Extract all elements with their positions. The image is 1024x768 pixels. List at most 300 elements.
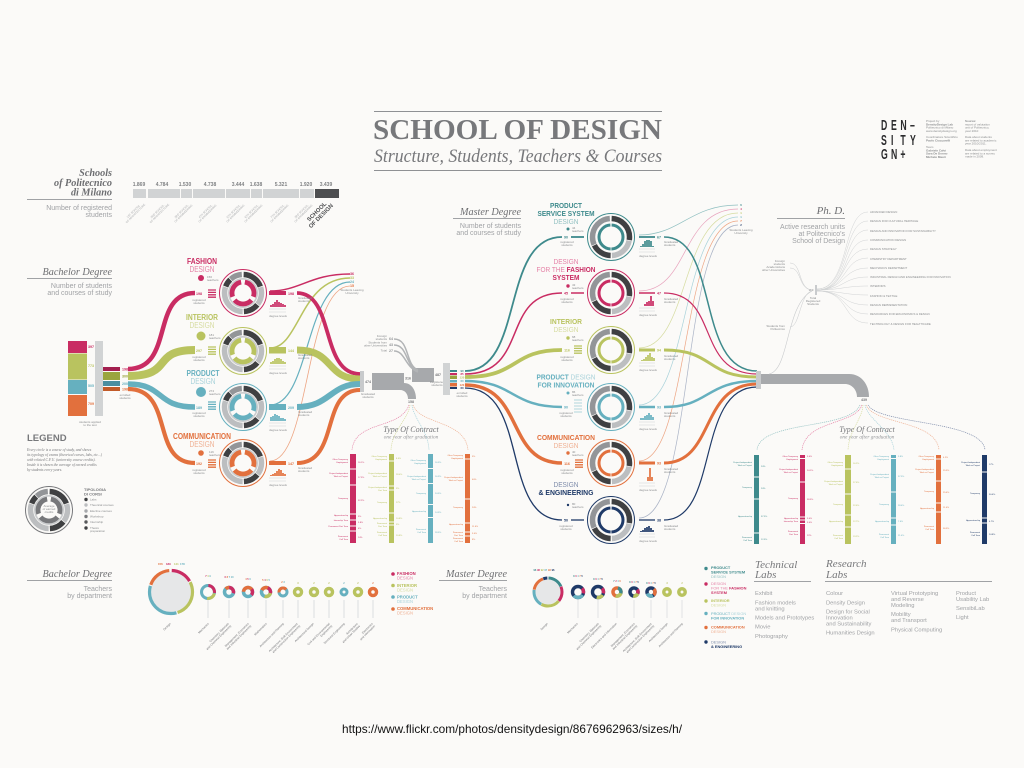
flows: grey hub from bachelor to master: 158 [408, 400, 414, 404]
legend: course types: DI CORSI [84, 492, 102, 496]
flows: grey hub from bachelor to master: 487 [435, 373, 441, 377]
panel: master communication ring: students [664, 470, 676, 474]
contract bar: fashion: Apprenticeship [334, 514, 349, 517]
contract bar: interior: 28.4% [396, 474, 402, 476]
heading: pss [538, 201, 594, 226]
master donut value labels: 3 [666, 582, 668, 585]
panel: fashion system ring: Graduated [664, 297, 679, 301]
legend: master courses: DESIGN [711, 602, 726, 608]
flows: master leaving university curves: 1 [740, 215, 742, 219]
contract bar: product: Work or Project [412, 478, 426, 481]
panel: product service system ring: students [664, 243, 676, 247]
panel: master communication ring: 40 [572, 450, 576, 454]
contract bar: interior: Permanent [377, 522, 387, 525]
panel: product design for innovation ring: registered [559, 411, 573, 415]
contract bar: master communication: 11.4% [943, 507, 949, 509]
flows: master leaving university curves: 4 [740, 207, 742, 211]
big donut: design: Design [162, 622, 172, 631]
contract bar: communication: Temporary [453, 506, 464, 509]
contract bar: communication: Work or Project [449, 479, 463, 482]
contract bar: master innovation: Project-Independent [870, 473, 889, 476]
panel: product service system ring [538, 201, 679, 260]
legend: by students every years. [27, 468, 62, 472]
flows: master leaving university curves: 2 [740, 223, 742, 227]
panel: research labs: Mobility [891, 612, 911, 618]
bar chart: registered students: 6TH SCHOOL [244, 204, 259, 219]
panel: technical labs: Photography [755, 634, 788, 640]
heading: communication design: COMMUNICATION [173, 432, 231, 441]
panel: bachelor input stack: 200 [122, 382, 128, 386]
contract bar: product [407, 454, 441, 543]
panel: fashion design ring: 198 [196, 292, 202, 296]
master donut value labels: 7 2 4 6 [613, 580, 621, 583]
heading: master teachers [439, 569, 507, 600]
department labels: Structural Engineering [323, 622, 346, 645]
small donut value labels: 5 4 6 5 [262, 579, 270, 582]
endpoint labels: bachelor exit [340, 272, 364, 295]
panel: fashion design ring [187, 257, 313, 318]
panel: master interior ring: students [664, 357, 676, 361]
panel: product design ring: 274 [209, 389, 214, 393]
panel: research labs: Density Design [826, 600, 865, 606]
endpoint labels: bachelor exit: 36 [350, 272, 354, 276]
panel: design and engineering ring: 38 [657, 518, 661, 522]
legend: course types: Theorical courses [90, 503, 114, 507]
bar chart: registered students: OF ENGINEERING [173, 203, 193, 223]
small donut value labels: 6 8 7 10 [224, 576, 234, 579]
contract bar: master fashion: Permanent [788, 530, 798, 533]
heading: design for the fashion system [536, 257, 596, 282]
contract bar: master interior [824, 455, 859, 544]
flows: grey hub from bachelor to master: 85 [460, 372, 464, 376]
panel: master communication ring: registered [560, 468, 574, 472]
panel: master interior ring [550, 317, 679, 374]
contract bar: communication: Full Time [455, 541, 464, 543]
flows: grey hub from bachelor to master: 60 [460, 386, 464, 390]
bar chart: registered students: 1.869 [133, 182, 145, 188]
bar chart: registered students: SCHOOL [306, 201, 328, 223]
heading: fashion design: DESIGN [190, 265, 215, 274]
panel: technical labs: Exhibit [755, 591, 773, 597]
panel: product design ring: students [298, 413, 310, 417]
contract bar: master innovation: Employment [877, 458, 889, 461]
panel: technical labs: Labs [754, 569, 776, 581]
panel: fashion design ring: students [193, 301, 205, 305]
heading: innovation: FOR INNOVATION [538, 380, 594, 390]
legend: bachelor courses: INTERIOR [397, 583, 417, 588]
credits: Project by [926, 119, 940, 123]
panel: design and engineering ring [538, 480, 679, 544]
panel: master communication ring: 93 [657, 462, 661, 466]
legend ring [26, 486, 72, 534]
contract bar: fashion: Project-Independent [329, 472, 348, 475]
contract bar: master interior: 16.2% [853, 463, 859, 465]
heading: design for the fashion system: FOR THE FASHION [536, 265, 596, 274]
contract bar: master communication: Project-Independent [915, 468, 934, 471]
contract bar: communication: 8% [472, 539, 475, 541]
phd research unit labels: TECHNOLOGY & DESIGN FOR HEALTHCARE [870, 322, 931, 326]
credits: report of valutation [965, 122, 990, 126]
contract bar: master fashion: 38.5% [807, 499, 813, 501]
flows: bachelor incoming [128, 293, 195, 463]
department labels: and Urban Studies [341, 624, 361, 644]
credits: year 2010 [965, 129, 979, 133]
contract bar: master engineering: Permanent [970, 531, 980, 534]
panel: fashion system ring: students [664, 300, 676, 304]
legend: bachelor courses: DESIGN [397, 588, 413, 592]
panel: fashion system ring: teachers [572, 286, 584, 290]
panel: master communication ring: students [561, 471, 573, 475]
panel: design and engineering ring: teachers [572, 505, 584, 509]
contract bar: master innovation: 37.5% [898, 476, 904, 478]
credits: Politecnico di Milano [926, 126, 954, 130]
contract bar: master communication: Employment [922, 458, 934, 461]
contract bar: master fashion: Part Time [789, 533, 799, 536]
master donut value labels: 8 6 4 7 5 [593, 578, 603, 581]
legend: bachelor courses: FASHION [397, 571, 416, 576]
panel: phd [762, 205, 951, 331]
contract bar: fashion: 17.3% [358, 477, 364, 479]
contract bar: interior: 27% [396, 502, 400, 504]
flows: grey hub from bachelor to master: 64 [389, 337, 393, 341]
credits: Sara De Donno [926, 152, 948, 156]
panel: product design for innovation ring: 90 [564, 406, 568, 410]
panel: research labs: Research [825, 558, 867, 570]
panel: research labs: Physical Computing [891, 628, 942, 634]
legend: master courses: DESIGN [711, 640, 726, 644]
panel: communication design ring: students [193, 471, 205, 475]
contract bar: master interior: Temporary [833, 503, 844, 506]
legend: master courses: FOR INNOVATION [711, 616, 744, 620]
legend: master courses: SERVICE SYSTEM [711, 570, 745, 574]
credits: www.densitydesign.org [926, 129, 957, 133]
heading: master contract: one year after graduation [840, 434, 895, 440]
contract bar: interior: 3% [396, 524, 399, 526]
heading: bachelor degree: Number of students [51, 283, 112, 290]
phd research unit labels: MECHANICS DEPARTMENT [870, 266, 907, 270]
panel: research labs: Humanities Design [826, 630, 875, 636]
panel: fashion design ring: teachers [207, 278, 219, 282]
heading: bachelor teachers: Teachers [84, 586, 112, 593]
legend: bachelor courses: DESIGN [397, 599, 413, 604]
heading: master degree [453, 207, 521, 237]
panel: communication design ring: students [298, 469, 310, 473]
contract bar: interior: 8.5% [396, 458, 401, 460]
credits: are related to a survey [965, 151, 995, 155]
heading: master teachers: by department [462, 593, 507, 600]
big donut: master design: Design [540, 622, 549, 631]
bar chart: registered students: OF ENGINEERING [197, 203, 217, 223]
contract bar: master innovation: Permanent [879, 533, 889, 536]
legend: bachelor courses: DESIGN [397, 576, 413, 580]
panel: bachelor input stack: 198 [122, 388, 128, 392]
heading: phd: Active research units [780, 224, 845, 231]
panel: technical labs: Movie [755, 624, 770, 630]
bar chart: registered students: 2ND SCHOOL [149, 203, 165, 219]
phd hub and inputs: students [774, 262, 785, 266]
legend: master courses: & ENGINEERING [711, 644, 742, 649]
panel: research labs: SensibiLab [956, 606, 985, 612]
contract bar: master engineering: Work or Project [966, 464, 980, 467]
contract bar: master communication: Full Time [926, 529, 935, 531]
panel: fashion design ring: registered [192, 298, 206, 302]
panel: product design ring [186, 369, 313, 432]
panel: communication design ring: teachers [209, 453, 221, 457]
contract bar: master fashion: Employment [786, 458, 798, 461]
legend: Every circle is a course of study, and shows [26, 448, 92, 453]
phd hub and inputs: Students from [766, 324, 785, 328]
small donut value labels [205, 575, 374, 585]
master department labels: Architectural Design [648, 622, 669, 643]
panel: interior design ring: teachers [209, 336, 221, 340]
panel: schools of politecnico [27, 168, 339, 230]
dashed connectors master [757, 405, 985, 450]
master department labels: and Industrial Engineering [611, 624, 638, 651]
contract bar: communication: Other Temporary [447, 454, 464, 457]
flows: master leaving university curves: 6 [740, 203, 742, 207]
contract bar: master interior: 27.6% [853, 482, 859, 484]
contract bar: master fashion: Internship Time [784, 520, 799, 523]
heading: phd: Ph. D. [816, 205, 845, 217]
heading: pss: DESIGN [554, 217, 578, 226]
heading: interior design: INTERIOR [186, 313, 218, 322]
contract bar: communication: 24% [472, 507, 476, 509]
contract bar: master interior: 12.7% [853, 521, 859, 523]
contract bar: master communication: Permanent [924, 525, 934, 528]
contract bar: master communication: 25.5% [943, 470, 949, 472]
flows: master leaving university curves: University [734, 231, 748, 235]
contract bar: interior: Part Time [378, 489, 388, 492]
small donut value labels: 2 [343, 582, 345, 585]
bar chart: registered students: OF DESIGN [308, 203, 335, 230]
panel: bachelor input stack: to the test [83, 423, 97, 427]
credits: Data about students [965, 135, 992, 139]
department labels: Management, Economics [224, 622, 250, 648]
heading: schools: students [86, 212, 112, 219]
contract bar: interior: Apprenticeship [373, 517, 388, 520]
contract bar: master communication: Temporary [924, 490, 935, 493]
contract bar: product: Permanent [416, 528, 426, 531]
heading: fashion design [187, 257, 217, 274]
flows: grey hub from bachelor to master: 43 [389, 343, 393, 347]
bar chart: registered students: 3RD SCHOOL [173, 203, 189, 219]
contract bar: interior: Other Temporary [371, 455, 388, 458]
contract bar: master innovation: Work or Project [875, 476, 889, 479]
small donut value labels: 2 3 [281, 581, 285, 584]
heading: schools: di Milano [71, 188, 112, 198]
flows: grey hub from bachelor to master: 316 [405, 376, 411, 380]
panel: design and engineering ring: students [664, 527, 676, 531]
legend: master courses: DESIGN [711, 581, 726, 586]
panel: research labs: Product [956, 591, 976, 597]
panel: product service system ring: 67 [657, 236, 661, 240]
title [373, 112, 662, 170]
contract bar: fashion: Employment [336, 461, 348, 464]
flows: grey hub from bachelor to master: 120 [460, 383, 465, 387]
department labels: Civil and Environmental [306, 622, 331, 646]
phd research unit labels: DESIGN STRATEGY [870, 247, 897, 251]
panel: product service system ring: 90 [564, 236, 568, 240]
panel: product design for innovation ring: students [664, 414, 676, 418]
master department labels [566, 621, 684, 655]
contract bar: fashion: Work or Project [334, 475, 348, 478]
logo: density design: DEN– [881, 117, 915, 134]
contract bar: master engineering: 24.8% [989, 534, 995, 536]
legend: master courses: COMMUNICATION [711, 624, 745, 630]
legend: master courses: DESIGN [711, 574, 726, 579]
endpoint labels: bachelor exit: 24 [350, 280, 354, 284]
panel: technical labs [754, 559, 814, 640]
panel: product design ring: teachers [209, 392, 221, 396]
small donuts: master departments [570, 584, 685, 618]
heading: bachelor degree: Bachelor Degree [42, 267, 112, 278]
legend: bachelor courses: COMMUNICATION [397, 606, 433, 611]
phd hub and inputs: 119 [809, 288, 814, 292]
heading: bachelor teachers: Bachelor Degree [42, 569, 112, 580]
panel: bachelor input stack: 397 [88, 345, 94, 349]
phd fan of research units [817, 212, 868, 323]
contract bar: product: Apprenticeship [412, 510, 427, 513]
contract bar: master engineering: 4.7% [989, 521, 994, 523]
heading: bachelor teachers [27, 569, 112, 600]
legend: master courses [704, 565, 747, 649]
contract bar: interior: Part Time [378, 525, 388, 528]
panel: master interior ring: degree levels [639, 368, 657, 372]
big donut: design: 189 [166, 562, 171, 566]
phd research unit labels: ADVANCED DESIGN [870, 210, 897, 214]
legend: course types: Thesis [90, 526, 99, 530]
legend: bachelor courses [391, 571, 433, 616]
credits: Source: [965, 119, 976, 123]
heading: contract: Type Of Contract [383, 425, 439, 434]
panel: product service system ring: teachers [572, 229, 584, 233]
contract bar: master communication: 25.4% [943, 492, 949, 494]
heading: pss: PRODUCT [550, 201, 582, 210]
credits: made in 2009. [965, 155, 984, 159]
heading: master degree: Master Degree [459, 207, 521, 218]
panel: fashion design ring: degree levels [269, 314, 287, 318]
contract bar: pss: Project-Independent [733, 461, 752, 464]
legend ring: Average [43, 504, 55, 508]
contract bar: pss: Apprenticeship [738, 515, 753, 518]
heading: bachelor degree: and courses of study [47, 290, 112, 297]
legend: master courses: PRODUCT DESIGN [711, 611, 746, 616]
heading: communication design: DESIGN [190, 440, 215, 449]
master department labels: and Construction Engineering [625, 624, 655, 654]
panel: fashion system ring: students [561, 300, 573, 304]
contract bar: fashion: Full Time [340, 539, 349, 541]
credits: Michele Mauri [926, 155, 946, 159]
heading: pss: SERVICE SYSTEM [538, 209, 594, 218]
contract bar: product: Full Time [418, 532, 427, 534]
department labels: Engineering [319, 624, 333, 638]
flows: master outgoing [664, 237, 757, 520]
panel: design and engineering ring: Graduated [664, 524, 679, 528]
panel: research labs: Design for Social [826, 610, 870, 616]
bar chart: registered students: 1.920 [300, 182, 312, 188]
contract bar: master interior: Full Time [835, 538, 844, 540]
heading: product design [186, 369, 220, 386]
panel: interior design ring: 297 [196, 349, 202, 353]
master department labels: Management, Economics [610, 622, 636, 648]
bar chart: registered students: OF ARCHITECTURE [125, 203, 146, 224]
panel: interior design ring: 144 [288, 349, 294, 353]
legend: course types: preparation [90, 529, 106, 533]
phd hub and inputs: Politecnico [770, 327, 785, 331]
contract bar: master innovation: Other Temporary [873, 455, 890, 458]
logo: density design [881, 117, 916, 163]
contract bar: master interior: 22.6% [853, 505, 859, 507]
contract bar: master innovation: Full Time [881, 537, 890, 539]
credits: Paolo Ciuccarelli [926, 138, 950, 142]
contract bar: interior [368, 454, 402, 543]
department labels: Mechanics [197, 621, 210, 634]
legend: master courses: SYSTEM [711, 590, 727, 595]
endpoint labels: bachelor exit: University [345, 291, 359, 295]
master department labels: Architecture and Planning [657, 622, 684, 648]
flows: grey hub from bachelor to master: Graduated [361, 392, 375, 396]
panel: product design for innovation ring: 93 [657, 406, 661, 410]
panel: product service system ring: registered [560, 240, 574, 244]
flows: master leaving university curves: 7 [740, 219, 742, 223]
phd hub and inputs [762, 259, 821, 331]
panel: master communication ring: Graduated [664, 467, 679, 471]
small donut value labels: 2 [357, 582, 359, 585]
bar chart: registered students: OF ARCHITECTURE [149, 203, 170, 224]
heading: master communication: DESIGN [554, 441, 578, 450]
panel: research labs: Labs [825, 569, 847, 581]
panel: design and engineering ring: 50 [564, 518, 568, 522]
contract bar: communication: 40% [472, 479, 476, 481]
flows: grey hub from bachelor to master: students [431, 383, 443, 387]
contract bar: master fashion: Work or Project [784, 471, 798, 474]
contract bar: pss: 24% [761, 488, 765, 490]
panel: research labs: Innovation [826, 616, 853, 622]
contract bar: master fashion: 24.1% [807, 470, 813, 472]
bar chart: registered students: 7TH SCHOOL [270, 204, 285, 219]
panel: design and engineering ring: students [560, 527, 572, 531]
phd research unit labels: DESIGN AND INNOVATION FOR SUSTAINABILITY [870, 229, 936, 233]
phd research unit labels: INTERIORS [870, 284, 886, 288]
contract bar: master innovation: Apprenticeship [875, 520, 890, 523]
contract bar: product: 28.5% [435, 532, 441, 534]
legend ring: credits [45, 510, 54, 514]
heading: fashion design: FASHION [187, 257, 217, 266]
contract bar: fashion: 4% [358, 528, 361, 530]
panel: master interior ring: registered [560, 355, 574, 359]
heading: master degree: and courses of study [456, 230, 521, 237]
bar chart: registered students: OF ENGINEERING [243, 203, 263, 223]
panel: bachelor type of contract [328, 405, 478, 543]
panel: interior design ring: registered [192, 355, 206, 359]
source url: https://www.flickr.com/photos/densitydesign/8676962963/sizes/h/ [342, 723, 683, 736]
heading: schools: Schools [79, 168, 112, 179]
contract bar: master fashion: 22% [807, 535, 811, 537]
flows: grey hub from bachelor to master: 27 [389, 349, 393, 353]
panel: bachelor input stack: students [119, 396, 131, 400]
bar chart: registered students: 4.784 [156, 182, 168, 188]
credits: Data about employment [965, 148, 997, 152]
legend: master courses: FOR THE FASHION [711, 586, 747, 590]
contract bar: product: 14.3% [435, 512, 441, 514]
panel: master interior ring: students [561, 358, 573, 362]
dashed connectors [352, 405, 468, 450]
panel: design and engineering ring: 80 [572, 502, 576, 506]
contract bar: pss: Permanent [742, 536, 752, 539]
department labels: and Information [359, 624, 376, 641]
contract bar: master engineering: Full Time [972, 535, 981, 537]
flows: grey hub from bachelor to master: students [456, 394, 468, 398]
